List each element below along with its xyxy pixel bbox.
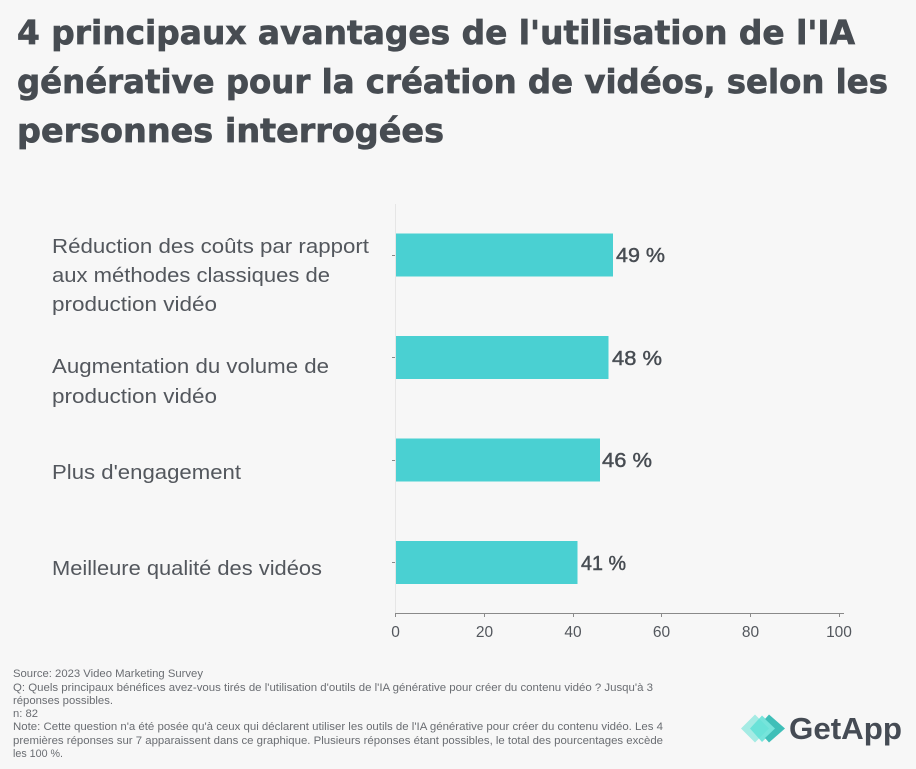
- footnote: premières réponses sur 7 apparaissent dans ce graphique. Plusieurs réponses étant possibles, le total des pourcentages excède: [13, 735, 663, 747]
- row: plus d'engagement: [52, 438, 652, 484]
- x axis: 80: [742, 624, 759, 641]
- row: réduction des coûts: Réduction des coûts par rapport: [52, 235, 369, 258]
- row: augmentation du volume: production vidéo: [52, 385, 217, 408]
- title: personnes interrogées: [17, 111, 444, 150]
- row: meilleure qualité: Meilleure qualité des vidéos: [52, 557, 322, 580]
- icon: GetApp diamonds: [741, 714, 785, 742]
- row: augmentation du volume: Augmentation du volume de: [52, 355, 329, 378]
- footnote: n: 82: [13, 708, 38, 720]
- footnote: Note: Cette question n'a été posée qu'à ceux qui déclarent utiliser les outils de l'IA générative pour créer du contenu vidéo. Les 4: [13, 721, 663, 733]
- bar chart: [52, 204, 852, 641]
- row: augmentation du volume: [52, 336, 662, 408]
- footnote: Source: 2023 Video Marketing Survey: [13, 668, 204, 680]
- row: plus d'engagement: 46 %: [602, 449, 652, 472]
- title: 4 principaux avantages de l'utilisation de l'IA: [17, 13, 855, 52]
- x axis: [391, 613, 852, 641]
- title: générative pour la création de vidéos, selon les: [17, 62, 888, 101]
- y axis line: [394, 204, 396, 613]
- title: [17, 13, 888, 150]
- row: meilleure qualité: 41 %: [581, 552, 626, 575]
- category ticks: [392, 256, 395, 562]
- x axis: 0: [391, 624, 400, 641]
- footnote: les 100 %.: [13, 748, 63, 760]
- row: réduction des coûts: production vidéo: [52, 293, 217, 316]
- footnote: Q: Quels principaux bénéfices avez-vous tirés de l'utilisation d'outils de l'IA générative pour créer du contenu vidéo ? Jusqu'à 3: [13, 682, 653, 694]
- logo: GetApp: GetApp: [789, 711, 902, 746]
- footnote: réponses possibles.: [13, 695, 113, 707]
- x axis: 60: [653, 624, 670, 641]
- x axis: 100: [826, 624, 852, 641]
- row: réduction des coûts: aux méthodes classiques de: [52, 264, 330, 287]
- row: plus d'engagement: Plus d'engagement: [52, 461, 241, 484]
- x axis: 40: [564, 624, 582, 641]
- row: réduction des coûts: [52, 234, 665, 316]
- row: augmentation du volume: 48 %: [612, 347, 662, 370]
- footnote: [13, 668, 663, 760]
- x axis: 20: [476, 624, 493, 641]
- logo: GetApp: [741, 711, 902, 746]
- row: réduction des coûts: 49 %: [616, 244, 665, 267]
- row: meilleure qualité: [52, 541, 626, 584]
